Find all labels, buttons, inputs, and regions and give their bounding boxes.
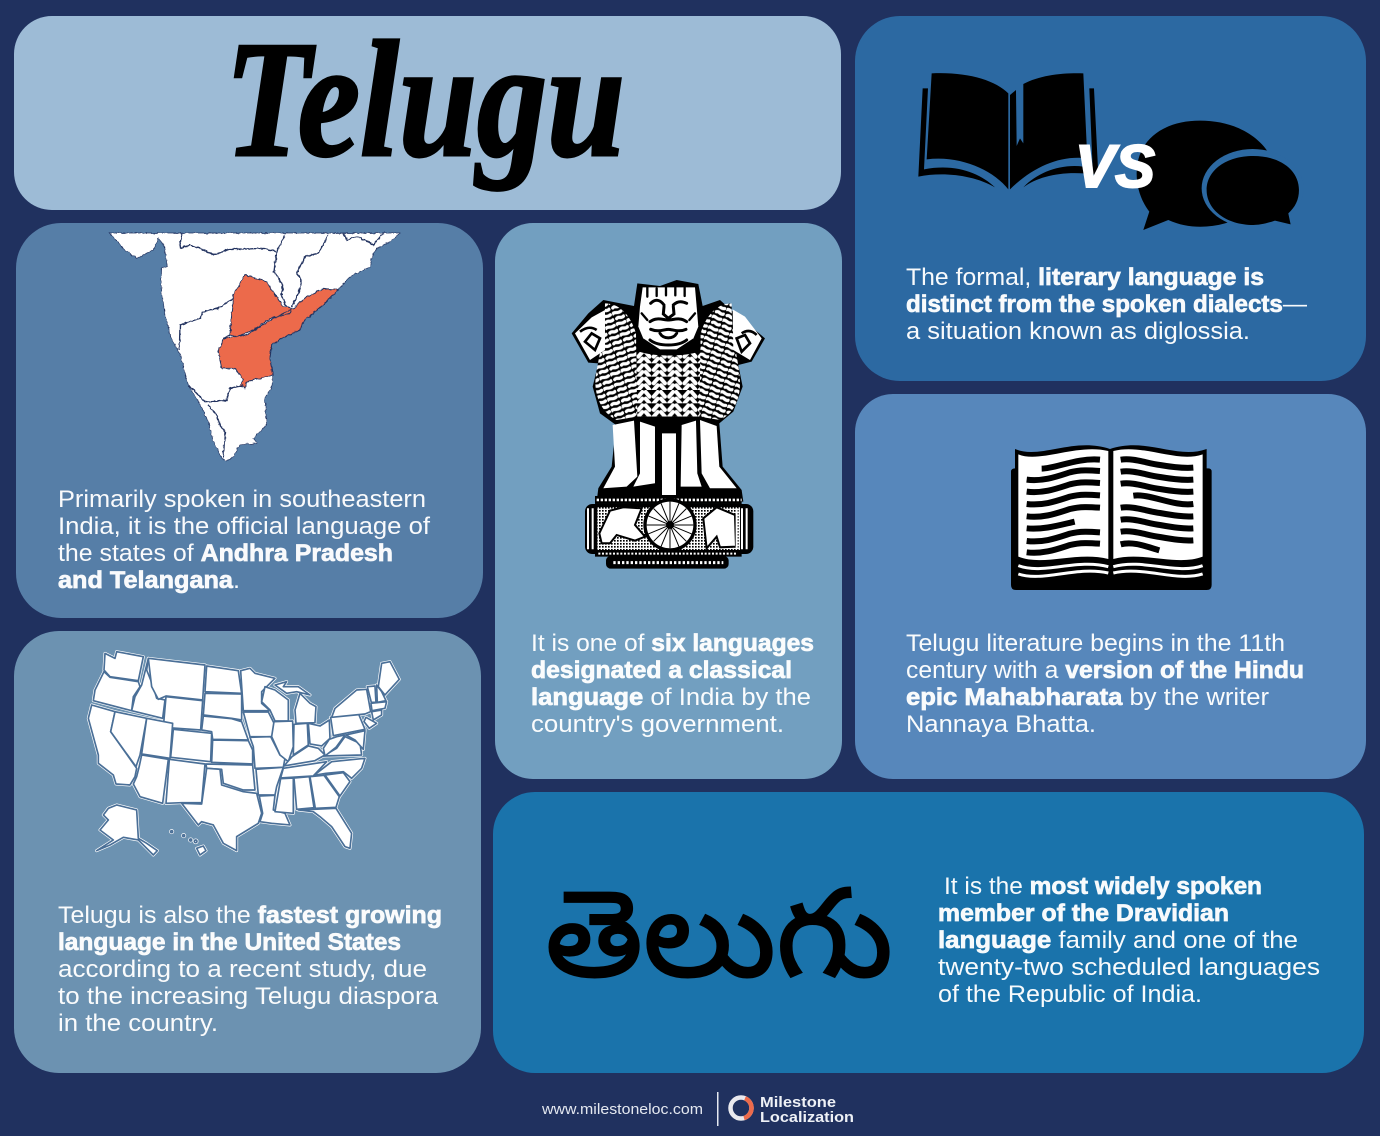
panel: United States [14, 631, 481, 1073]
text: VS: VS [1075, 133, 1155, 200]
text: diglossia: The formal, literary language is [906, 264, 1264, 291]
text: six classical languages: language of India by the [531, 684, 811, 711]
logo: ring [730, 1098, 752, 1118]
divider [717, 1092, 718, 1126]
panel: title [14, 7, 841, 210]
panel: language map of India [16, 223, 483, 618]
heading: Telugu: Telugu [225, 7, 625, 191]
text: Nannaya Bhatta: Nannaya Bhatta. [906, 711, 1096, 738]
text: fastest growing: Telugu is also the fastest growing [58, 902, 442, 929]
text: Dravidian: member of the Dravidian [938, 900, 1229, 927]
text: website: www.milestoneloc.com [541, 1102, 703, 1118]
text: southeastern India [58, 486, 430, 594]
text: six classical languages: It is one of six languages [531, 630, 814, 657]
text: Dravidian: twenty-two scheduled languages [938, 954, 1320, 981]
text: southeastern India: Primarily spoken in southeastern [58, 486, 426, 513]
text: Dravidian: language family and one of the [938, 927, 1298, 954]
text: Dravidian: It is the most widely spoken [944, 873, 1262, 900]
text: Dravidian [938, 873, 1320, 1008]
text: Nannaya Bhatta: epic Mahabharata by the writer [906, 684, 1269, 711]
panel: literature [855, 394, 1366, 779]
logo: wordmark: Milestone [760, 1094, 836, 1111]
text: southeastern India: and Telangana . [58, 567, 240, 594]
text: fastest growing: according to a recent study, due [58, 956, 427, 983]
logo: wordmark: Localization [760, 1109, 854, 1126]
text: diglossia: a situation known as diglossia. [906, 318, 1250, 345]
footer [541, 1092, 854, 1126]
text: fastest growing [58, 902, 442, 1037]
icon: book versus speech bubbles [918, 73, 1304, 230]
text: Dravidian: of the Republic of India. [938, 981, 1202, 1008]
icon: Lion Capital emblem [572, 280, 765, 569]
logo: wordmark [760, 1094, 854, 1126]
text: southeastern India: the states of Andhra Pradesh [58, 540, 393, 567]
panel: classical language [495, 223, 842, 779]
text: six classical languages [531, 630, 814, 738]
map: United States [88, 652, 399, 855]
panel: Dravidian language [493, 792, 1364, 1073]
text: six classical languages: country's government. [531, 711, 784, 738]
text: Nannaya Bhatta: Telugu literature begins in the 11th [906, 630, 1285, 657]
text: Telugu script: తెలుగు [545, 870, 893, 1035]
text: Nannaya Bhatta: century with a version of the Hindu [906, 657, 1304, 684]
text: Nannaya Bhatta [906, 630, 1304, 738]
text: six classical languages: designated a classical [531, 657, 792, 684]
panel: diglossia [855, 16, 1366, 381]
text: southeastern India: India, it is the official language of [58, 513, 430, 540]
text: diglossia [906, 264, 1307, 345]
text: fastest growing: in the country. [58, 1010, 218, 1037]
text: fastest growing: to the increasing Telugu diaspora [58, 983, 439, 1010]
text: diglossia: distinct from the spoken dialects— [906, 291, 1307, 318]
map: southern India with Andhra Pradesh and Telangana highlighted [109, 233, 400, 461]
icon: open book with text lines [1011, 445, 1212, 590]
text: fastest growing: language in the United States [58, 929, 401, 956]
